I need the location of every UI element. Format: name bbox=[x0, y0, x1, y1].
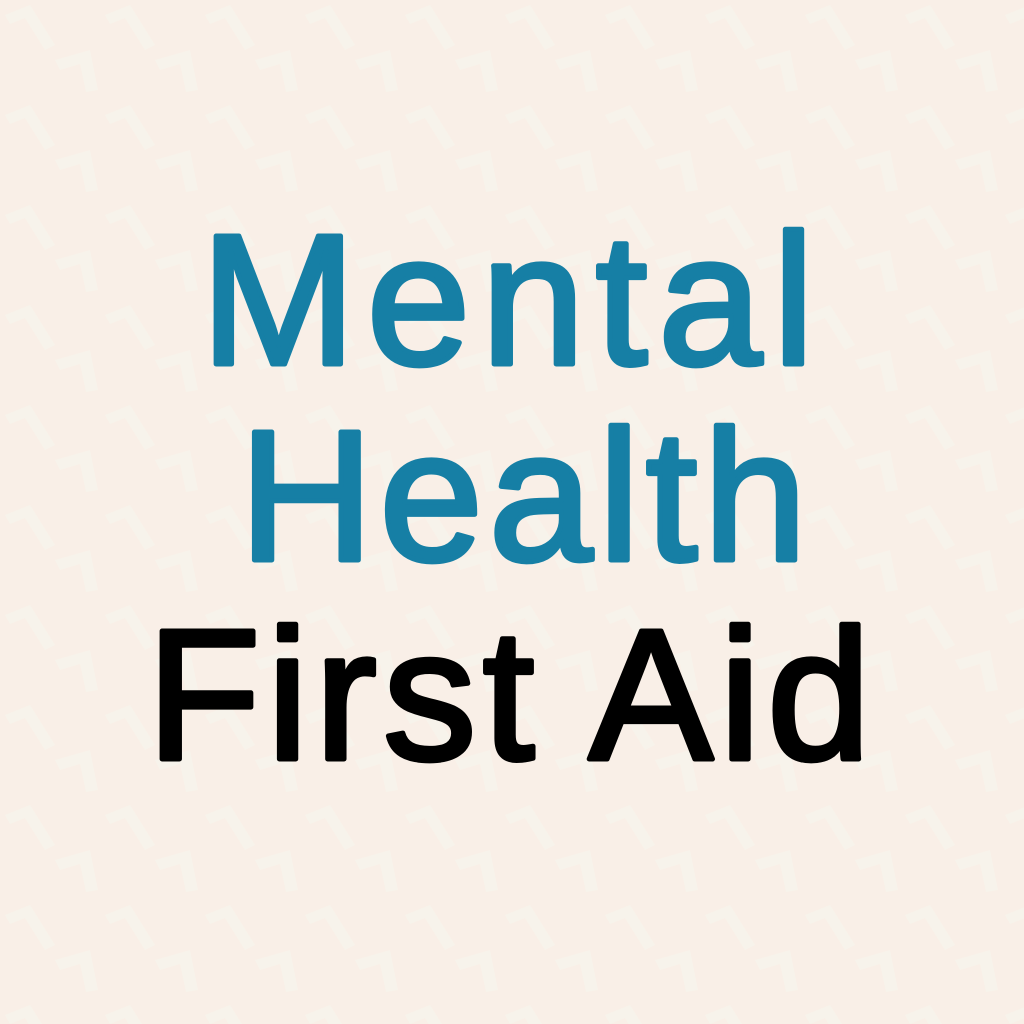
title line: Mental: Mental bbox=[201, 197, 825, 404]
title line: Health: Health bbox=[239, 393, 813, 600]
title line: First Aid: First Aid bbox=[147, 592, 877, 799]
title bbox=[147, 197, 877, 799]
